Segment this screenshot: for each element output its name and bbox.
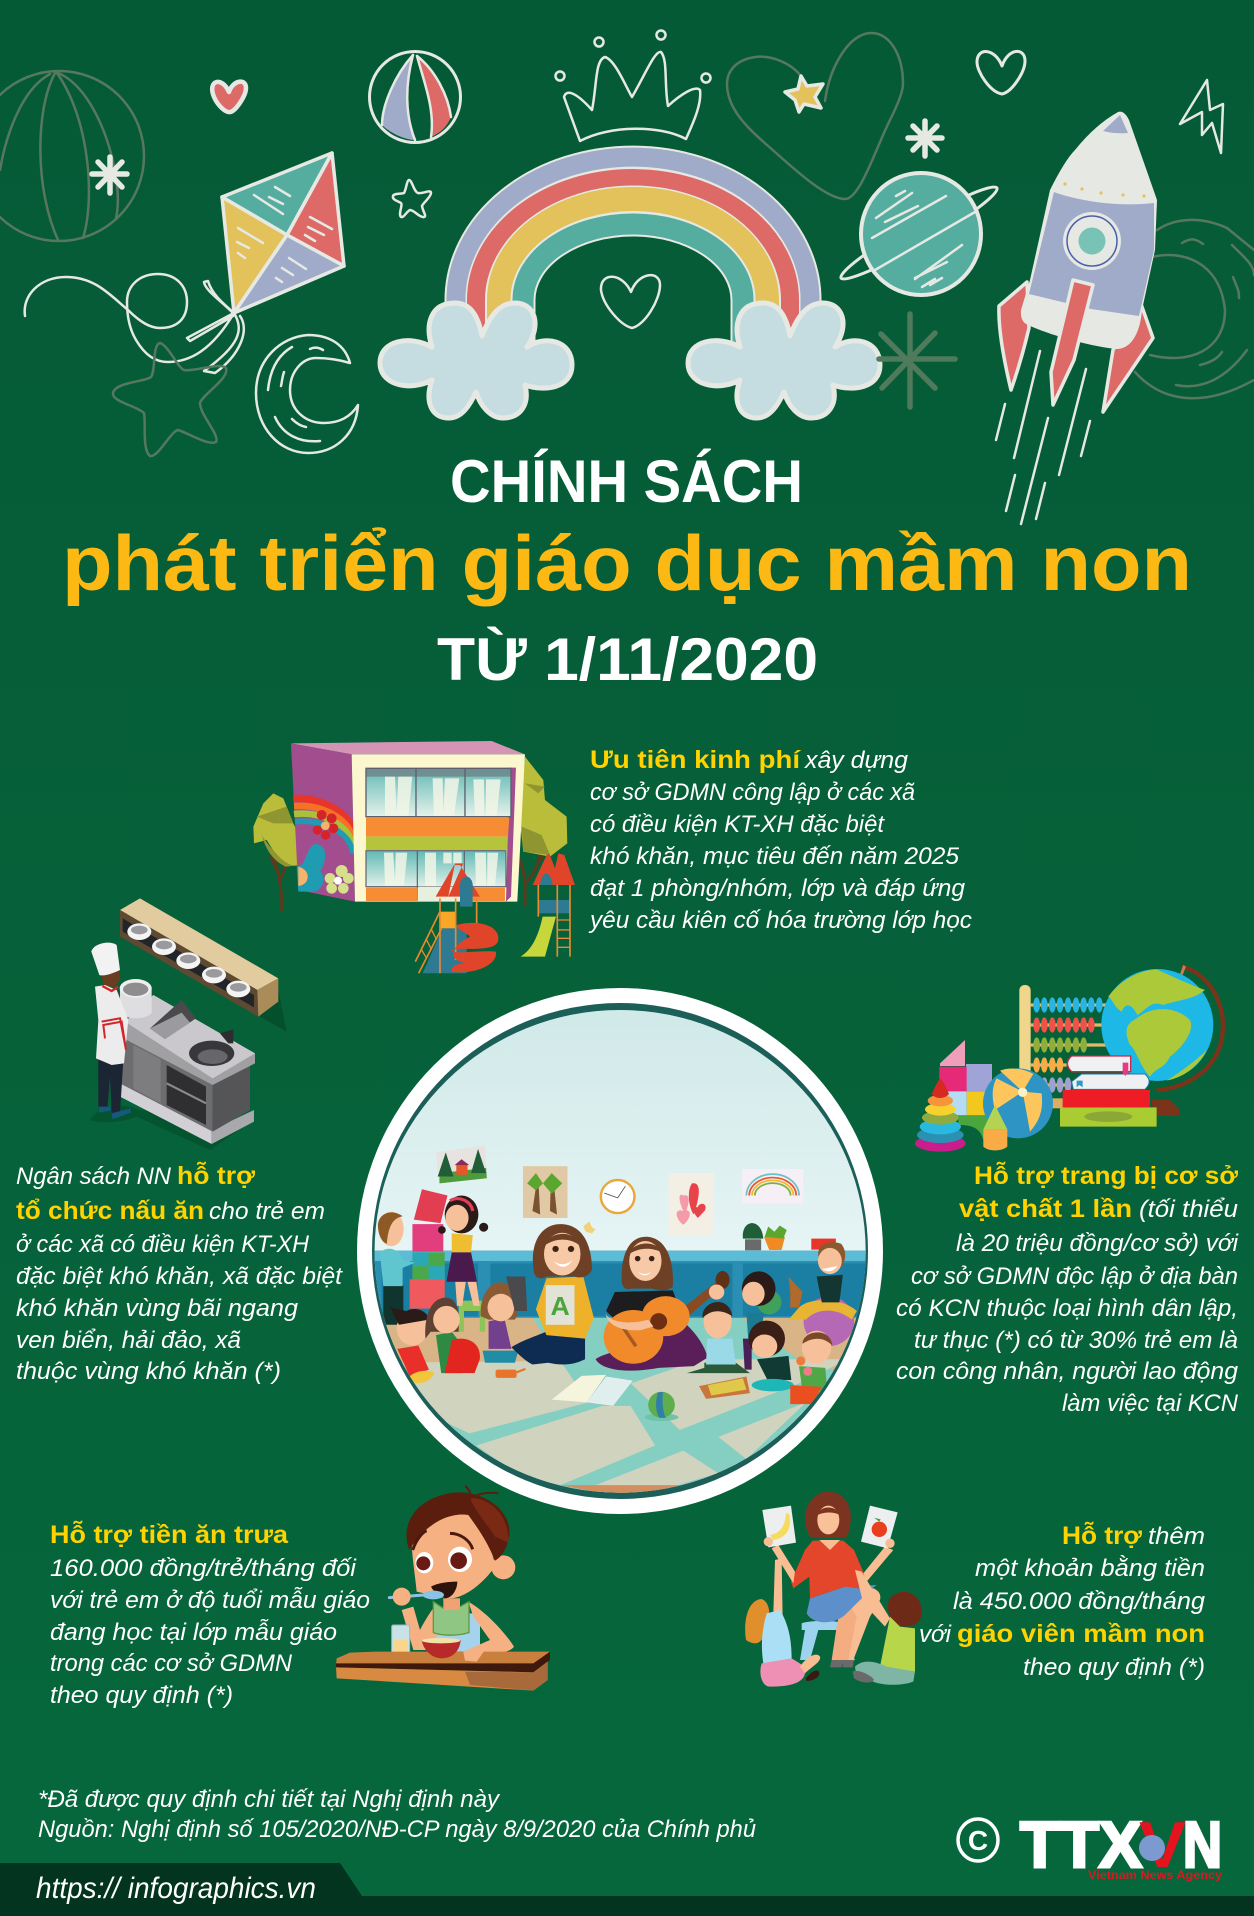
text block: kinh phí [588, 746, 972, 934]
highlight: giáo viên mầm non [957, 1620, 1205, 1648]
text block: tiền ăn trưa: đang học tại lớp mẫu giáo [50, 1618, 337, 1646]
text block: tiền ăn trưa: với trẻ em ở độ tuổi mẫu giáo [50, 1586, 370, 1614]
text block: giáo viên: một khoản bằng tiền [975, 1555, 1205, 1582]
copyright mark: C [968, 1825, 988, 1856]
outline star [393, 180, 431, 217]
highlight: Hỗ trợ tiền ăn trưa [50, 1519, 289, 1549]
text block: kinh phí: có điều kiện KT-XH đặc biệt [590, 811, 885, 838]
logo: TTXVN: N [1183, 1808, 1222, 1881]
icon: toys and globe [915, 965, 1223, 1152]
footer bar [0, 1863, 1254, 1916]
text block: kinh phí: xây dựng [804, 747, 909, 774]
text block: kinh phí: yêu cầu kiên cố hóa trường lớp học [588, 907, 972, 934]
text block: nấu ăn: thuộc vùng khó khăn (*) [16, 1358, 281, 1385]
ghost ball [0, 71, 144, 241]
crown [556, 30, 710, 141]
table [336, 1652, 550, 1665]
highlight: hỗ trợ [177, 1160, 255, 1190]
apple card [861, 1506, 898, 1548]
playground right [521, 853, 575, 957]
torso and arms [402, 1598, 514, 1662]
icon: school building [253, 741, 575, 973]
playground left [415, 863, 498, 973]
globe [1101, 965, 1223, 1116]
text block: nấu ăn: khó khăn vùng bãi ngang [16, 1295, 299, 1322]
stove [120, 979, 255, 1144]
ring pyramid [915, 1078, 966, 1152]
classroom scene [374, 1010, 866, 1493]
text block: trang bị: có KCN thuộc loại hình dân lập, [896, 1295, 1238, 1322]
ghost heart [727, 33, 903, 199]
text block: nấu ăn: ven biển, hải đảo, xã [16, 1327, 241, 1354]
text block: kinh phí: đạt 1 phòng/nhóm, lớp và đáp ứng [590, 875, 966, 902]
book and ball [552, 1375, 678, 1421]
banana card [762, 1506, 796, 1547]
teacher legs [842, 1587, 880, 1660]
text block: nấu ăn: đặc biệt khó khăn, xã đặc biệt [16, 1263, 343, 1290]
chef [91, 943, 131, 1119]
text block: trang bị: con công nhân, người lao động [896, 1358, 1239, 1385]
title line 2: phát triển giáo dục mầm non [62, 519, 1192, 607]
kids right [687, 1242, 857, 1404]
lightning [1180, 80, 1223, 153]
text block: trang bị: tư thục (*) có từ 30% trẻ em là [914, 1327, 1238, 1354]
kids left [390, 1277, 527, 1383]
heart under rainbow [601, 275, 660, 328]
text block: tiền ăn trưa: trong các cơ sở GDMN [50, 1650, 293, 1677]
website url: https:// infographics.vn [36, 1872, 316, 1905]
footnote and source: *Đã được quy định chi tiết tại Nghị định này [38, 1786, 501, 1813]
top and arms [791, 1541, 867, 1598]
text block: giáo viên: là 450.000 đồng/tháng [953, 1588, 1206, 1615]
text block: kinh phí: cơ sở GDMN công lập ở các xã [590, 779, 915, 806]
text block: trang bị [896, 1160, 1239, 1417]
text block: giáo viên: theo quy định (*) [1023, 1654, 1205, 1681]
right cloud [688, 303, 880, 418]
text block: giáo viên [919, 1520, 1206, 1681]
text block: trang bị: cơ sở GDMN độc lập ở địa bàn [911, 1263, 1238, 1290]
text block: kinh phí: khó khăn, mục tiêu đến năm 2025 [590, 843, 960, 870]
text block: nấu ăn: cho trẻ em [209, 1198, 325, 1225]
planet [836, 173, 1002, 295]
text block: trang bị: (tối thiểu [1139, 1196, 1238, 1223]
stool [800, 1621, 855, 1662]
text block: nấu ăn: Ngân sách NN [16, 1163, 172, 1190]
small red heart [212, 82, 246, 112]
kite [222, 153, 344, 313]
highlighted lead: Ưu tiên kinh phí [590, 746, 801, 774]
highlight: tổ chức nấu ăn [16, 1197, 204, 1225]
child left [745, 1558, 820, 1687]
text block: nấu ăn [16, 1160, 343, 1385]
shelf [371, 1251, 869, 1318]
striped ball [370, 52, 460, 142]
shelf [120, 898, 278, 1017]
text block: nấu ăn: ở các xã có điều kiện KT-XH [16, 1231, 310, 1258]
text block: tiền ăn trưa [50, 1519, 370, 1709]
glass of juice [392, 1625, 410, 1658]
title line 1: CHÍNH SÁCH [450, 448, 803, 515]
icon: teacher with flash cards [745, 1492, 922, 1687]
icon: boy eating [336, 1486, 550, 1691]
teacher with card [511, 1224, 594, 1365]
footnote and source: Nguồn: Nghị định số 105/2020/NĐ-CP ngày 8/9/2020 của Chính phủ [38, 1816, 756, 1843]
left tree [253, 793, 306, 910]
boy at blocks [378, 1212, 415, 1325]
skirt [807, 1585, 877, 1622]
kite tail [25, 274, 244, 373]
highlight: vật chất 1 lần [959, 1195, 1132, 1223]
text block: giáo viên: với [919, 1621, 952, 1648]
gold star [785, 76, 823, 112]
doodle header illustration [0, 30, 1254, 524]
white asterisk right [908, 121, 942, 156]
white asterisk left [92, 157, 127, 193]
ghost star [113, 343, 226, 456]
spoon [389, 1595, 423, 1598]
crescent moon [256, 335, 358, 453]
icon: chef in kitchen [90, 898, 287, 1150]
wall pictures [436, 1146, 836, 1250]
ghost spiral [1135, 220, 1254, 398]
cone block [983, 1105, 1007, 1150]
rainbow [456, 157, 810, 345]
beach ball [983, 1068, 1053, 1138]
books [1060, 1056, 1157, 1127]
logo: TTXVN: TTX [1020, 1808, 1142, 1881]
left cloud [380, 303, 572, 418]
logo: TTXVN: V [1139, 1808, 1186, 1881]
copyright mark [958, 1819, 998, 1861]
highlight: Hỗ trợ [1062, 1520, 1142, 1550]
logo: TTXVN [958, 1808, 1222, 1882]
title [62, 448, 1192, 693]
footnote and source [38, 1786, 756, 1843]
title line 3: TỪ 1/11/2020 [437, 626, 818, 693]
text block: tiền ăn trưa: 160.000 đồng/trẻ/tháng đối [50, 1555, 357, 1582]
floor with tiles [384, 1318, 856, 1493]
text block: tiền ăn trưa: theo quy định (*) [50, 1682, 233, 1709]
white ring [357, 988, 883, 1514]
outline heart [977, 51, 1025, 94]
text block: trang bị: làm việc tại KCN [1062, 1390, 1239, 1417]
text block: trang bị: là 20 triệu đồng/cơ sở) với [956, 1230, 1239, 1257]
text block: giáo viên: thêm [1148, 1523, 1205, 1550]
child right [853, 1570, 922, 1685]
right tree [520, 757, 567, 905]
ghost asterisk [879, 314, 955, 407]
abacus [1019, 985, 1107, 1108]
teacher with card: A [551, 1291, 570, 1321]
girl on stool [438, 1196, 488, 1332]
bowl [422, 1640, 461, 1658]
teacher with guitar [596, 1237, 730, 1371]
blocks [939, 1040, 993, 1140]
blocks stack [410, 1189, 448, 1309]
head [406, 1486, 515, 1598]
highlight: Hỗ trợ trang bị cơ sở [974, 1160, 1238, 1190]
logo: TTXVN: Vietnam News Agency [1088, 1868, 1222, 1882]
central classroom circle [350, 988, 900, 1514]
rocket [996, 112, 1157, 524]
head [805, 1492, 851, 1538]
